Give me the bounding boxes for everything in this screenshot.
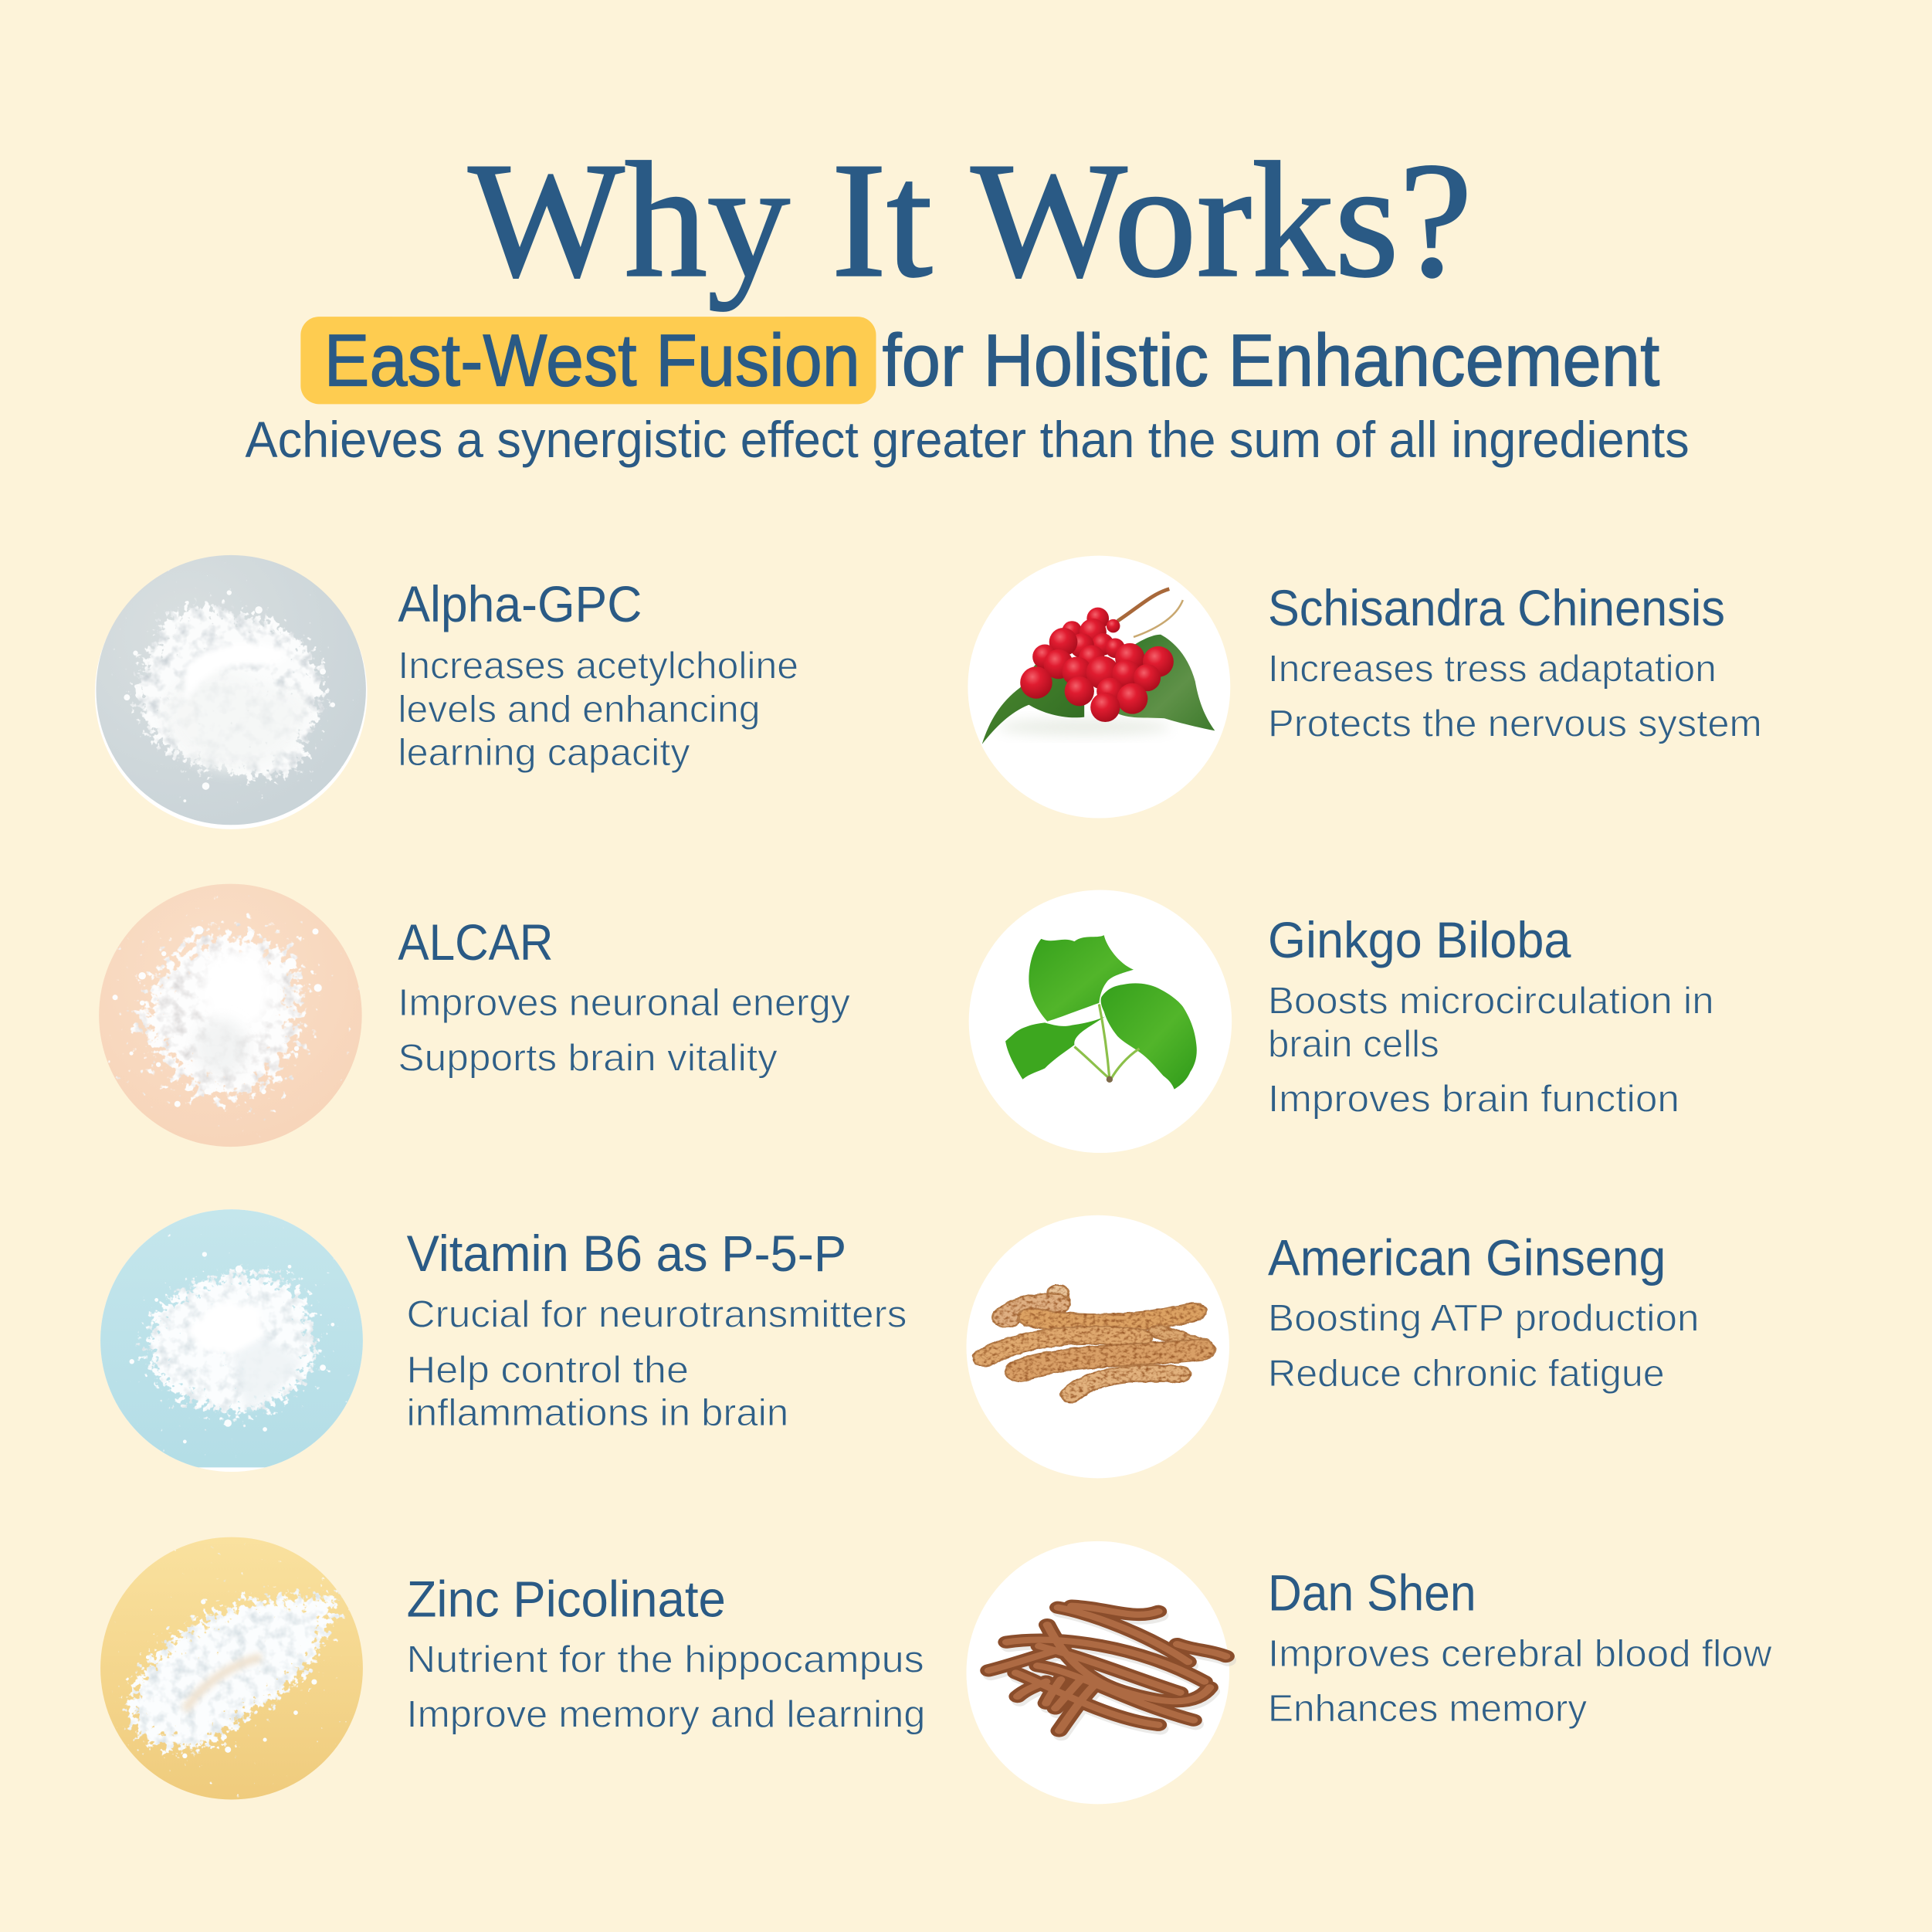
description: Improves neuronal energy <box>398 981 850 1024</box>
heading: Vitamin B6 as P-5-P <box>407 1225 846 1282</box>
heading: Zinc Picolinate <box>407 1571 726 1628</box>
icon: dried red roots <box>966 1541 1229 1804</box>
description: Enhances memory <box>1268 1687 1587 1730</box>
subtitle highlight: East-West Fusion: East-West Fusion <box>324 319 860 402</box>
title: Why It Works? <box>468 129 1473 312</box>
heading: Alpha-GPC <box>398 576 642 632</box>
heading: Dan Shen <box>1268 1565 1476 1622</box>
description <box>1268 979 1714 1120</box>
description: Improves cerebral blood flow <box>1268 1632 1772 1675</box>
description <box>398 644 798 774</box>
description: Boosts microcirculation in <box>1268 979 1714 1022</box>
heading: Ginkgo Biloba <box>1268 912 1571 968</box>
description: inflammations in brain <box>407 1391 788 1434</box>
description: Increases acetylcholine <box>398 644 798 686</box>
description: Boosting ATP production <box>1268 1296 1699 1339</box>
description <box>407 1638 925 1735</box>
icon: white powder on blue circle <box>100 1209 363 1472</box>
heading: Schisandra Chinensis <box>1268 580 1725 636</box>
description: levels and enhancing <box>398 688 761 730</box>
description <box>407 1293 907 1434</box>
icon: red berries with leaves <box>968 556 1230 819</box>
ingredient: Dan Shen <box>966 1541 1772 1804</box>
ingredient: Ginkgo Biloba <box>969 890 1714 1153</box>
heading: American Ginseng <box>1268 1230 1666 1286</box>
ingredient: American Ginseng <box>966 1215 1699 1478</box>
ingredient: Vitamin B6 as P-5-P <box>93 1202 907 1479</box>
description: Help control the <box>407 1348 689 1391</box>
description <box>398 981 850 1080</box>
icon: ginkgo leaves <box>969 890 1232 1153</box>
description: Improve memory and learning <box>407 1693 925 1735</box>
description: Increases tress adaptation <box>1268 647 1717 690</box>
description: learning capacity <box>398 731 690 774</box>
description: brain cells <box>1268 1022 1439 1065</box>
icon: white powder on peach circle <box>99 883 361 1147</box>
icon: white powder on yellow circle <box>100 1537 363 1799</box>
description <box>1268 1296 1699 1395</box>
description <box>1268 647 1762 744</box>
description <box>1268 1632 1772 1730</box>
ingredient: Zinc Picolinate <box>93 1528 925 1805</box>
ingredient: ALCAR <box>93 875 850 1152</box>
description: Nutrient for the hippocampus <box>407 1638 924 1680</box>
ingredient: Alpha-GPC <box>86 548 798 838</box>
description: Crucial for neurotransmitters <box>407 1293 907 1336</box>
description: Reduce chronic fatigue <box>1268 1352 1665 1395</box>
tagline: Achieves a synergistic effect greater than the sum of all ingredients <box>246 412 1690 468</box>
heading: ALCAR <box>398 914 553 971</box>
ingredient: Schisandra Chinensis <box>968 556 1762 819</box>
description: Improves brain function <box>1268 1077 1679 1120</box>
description: Supports brain vitality <box>398 1037 778 1080</box>
description: Protects the nervous system <box>1268 702 1762 744</box>
icon: ginseng roots <box>966 1215 1229 1478</box>
icon: white powder on grey circle <box>94 554 368 829</box>
subtitle remainder: for Holistic Enhancement <box>882 319 1659 402</box>
